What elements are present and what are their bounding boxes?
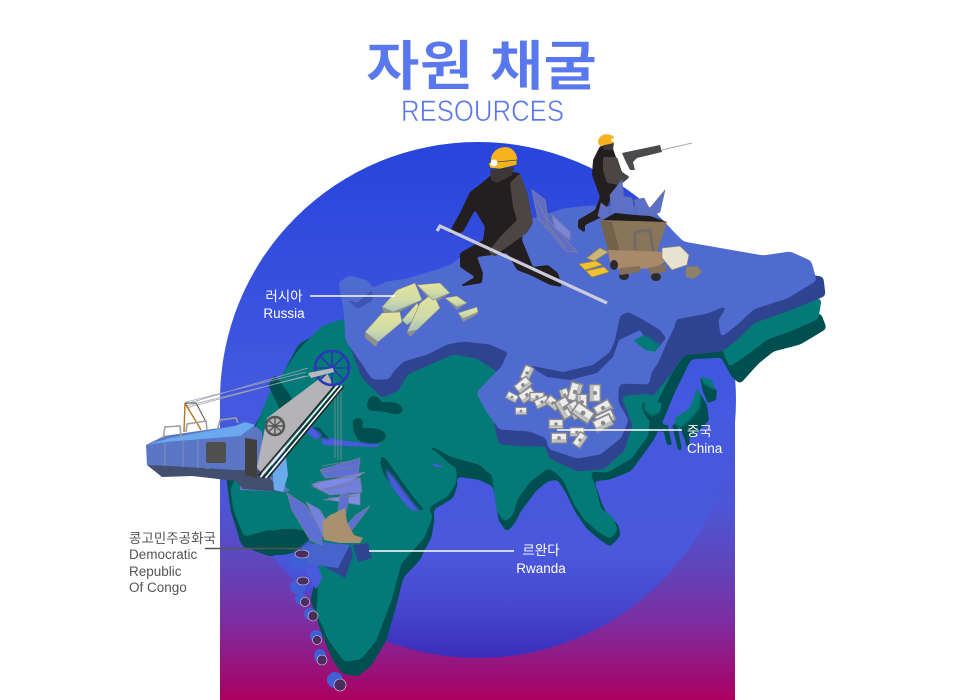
label: Democratic Republic of Congo: Republic <box>129 564 182 579</box>
brown rock <box>322 508 363 543</box>
helmet <box>598 134 614 146</box>
drill <box>622 145 662 170</box>
label: Democratic Republic of Congo: Democratic <box>129 547 198 562</box>
diamond beads <box>289 550 346 691</box>
label: Democratic Republic of Congo: 콩고민주공화국 <box>129 527 216 547</box>
head <box>490 167 514 183</box>
crowbar <box>437 226 607 303</box>
label: Russia: 러시아 <box>265 285 303 305</box>
grey arm <box>488 173 533 257</box>
land: russia shadow arc <box>345 290 666 380</box>
title: 자원 채굴 <box>366 22 597 101</box>
ore cart <box>579 180 702 281</box>
green ore rocks <box>365 283 478 347</box>
label: Democratic Republic of Congo: Of Congo <box>129 580 187 595</box>
cart frame <box>622 230 668 260</box>
drill bit <box>662 143 692 150</box>
rock tops <box>365 283 478 342</box>
railings <box>163 418 238 438</box>
white rock <box>662 246 689 270</box>
land: blue extrusion side <box>347 260 824 470</box>
body <box>578 146 617 233</box>
hull panels <box>165 438 198 470</box>
head <box>602 142 614 150</box>
money bills <box>505 365 616 448</box>
land: inland sea dark patches <box>236 375 495 590</box>
dark door <box>245 438 257 478</box>
crystal cluster <box>287 458 370 545</box>
gear wheel <box>266 417 284 435</box>
coal <box>601 213 667 226</box>
brown rock <box>686 266 702 279</box>
label: Democratic Republic of Congo <box>129 527 302 595</box>
background: circle with gradient <box>220 142 736 700</box>
label: Russia <box>263 285 395 321</box>
cart body <box>600 220 667 252</box>
dredge excavator <box>146 351 349 492</box>
arm <box>603 157 630 185</box>
land: japan and korea islands <box>642 376 717 450</box>
hull window <box>206 442 226 463</box>
land: periwinkle top face <box>340 207 815 457</box>
crystal near miner <box>532 190 577 252</box>
label: China: 중국 <box>687 420 712 440</box>
label: China: China <box>687 441 723 456</box>
land: teal top <box>232 300 820 660</box>
crystals in cart <box>598 180 665 222</box>
label: Rwanda: 르완다 <box>522 539 560 559</box>
cables <box>186 368 341 460</box>
gold bars <box>579 248 609 277</box>
orange mast <box>184 403 201 432</box>
top pulley wheel <box>315 351 349 385</box>
map: asia africa russia <box>228 207 825 675</box>
boom <box>257 373 334 474</box>
label: Russia: Russia <box>263 306 305 321</box>
label: Rwanda: Rwanda <box>516 561 566 576</box>
miner with drill <box>578 134 692 233</box>
label: China <box>557 420 723 456</box>
land: dark teal base <box>228 315 825 675</box>
helmet <box>491 147 517 168</box>
label: Rwanda <box>369 539 566 576</box>
hull <box>146 425 290 492</box>
black body <box>450 170 562 287</box>
wheels <box>610 260 661 281</box>
rock thickness <box>365 283 478 347</box>
hull underside <box>147 465 283 492</box>
subtitle: RESOURCES <box>401 95 564 128</box>
miner with crowbar <box>437 147 607 303</box>
congo blue block <box>302 542 372 578</box>
